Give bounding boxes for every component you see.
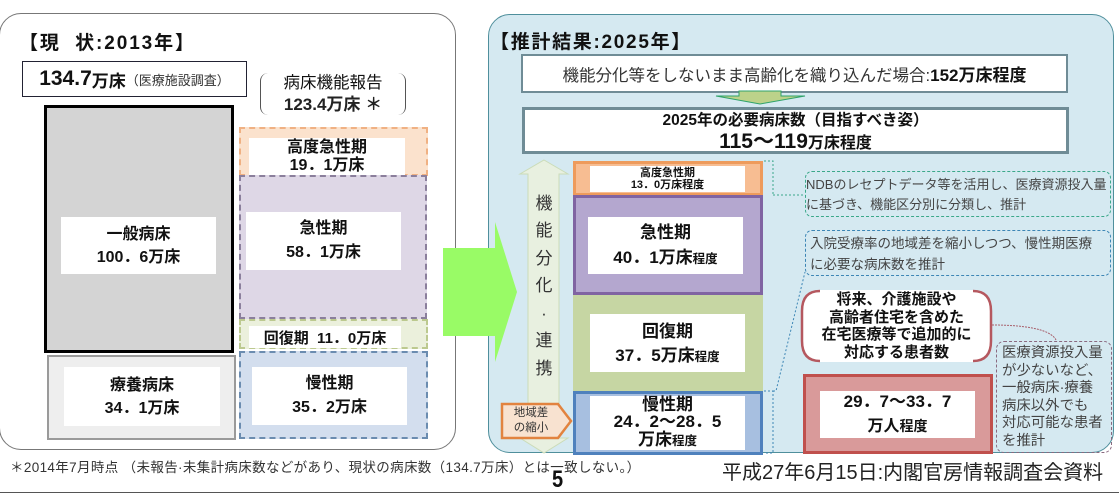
label: general beds xyxy=(61,217,216,274)
callout: home care patients xyxy=(801,290,992,362)
bracket: bed function report xyxy=(260,73,406,115)
callout: home care patients: 高齢者住宅を含めた xyxy=(829,308,964,326)
note: hospitalization rate xyxy=(805,230,1111,276)
note: NDB: NDBのレセプトデータ等を活用し、医療資源投入量 xyxy=(806,177,1106,192)
note: low resource patients: 一般病床·療養 xyxy=(1002,380,1093,396)
label: chronic current xyxy=(252,367,407,425)
block: recovery 2025 xyxy=(573,295,763,392)
label: acute current: 58．1万床 xyxy=(286,244,361,261)
note: low resource patients: 医療資源投入量 xyxy=(1002,345,1103,361)
label: chronic 2025 xyxy=(590,396,745,450)
label: chronic current: 慢性期 xyxy=(305,375,354,392)
label: acute current: 急性期 xyxy=(299,220,348,237)
callout: home care patients: 対応する患者数 xyxy=(844,344,949,360)
note: hospitalization rate: 入院受療率の地域差を縮小しつつ、慢性期医療 xyxy=(810,236,1092,251)
note: NDB: に基づき、機能区分別に分類し、推計 xyxy=(806,197,1026,212)
tag text: 地域差 xyxy=(514,407,548,419)
note: NDB xyxy=(805,171,1111,217)
label: high acute current xyxy=(249,138,405,175)
total beds box: 万床 xyxy=(92,72,126,90)
heading: estimate: 【推計結果:2025年】 xyxy=(490,32,692,53)
label: recovery 2025 xyxy=(590,314,745,372)
label: high acute 2025 xyxy=(590,166,745,192)
label: additional patients: 万人程度 xyxy=(867,418,928,435)
label: high acute current: 19．1万床 xyxy=(290,156,364,174)
note: low resource patients xyxy=(996,341,1112,453)
heading: current state: 【現 状:2013年】 xyxy=(19,33,196,54)
label: acute 2025: 急性期 xyxy=(640,222,691,242)
panel: current state 2013 xyxy=(0,13,456,450)
source: 平成27年6月15日:内閣官房情報調査会資料 xyxy=(722,462,1103,484)
block: chronic 2025 xyxy=(573,391,763,455)
total beds box xyxy=(22,61,247,97)
label: recovery current xyxy=(249,326,401,348)
label: chronic current: 35．2万床 xyxy=(292,399,367,416)
text: functional differentiation: 連 xyxy=(536,331,552,350)
note: low resource patients: を推計 xyxy=(1002,433,1045,449)
label: acute 2025 xyxy=(588,217,743,274)
bracket: bed function report: 病床機能報告 xyxy=(284,74,382,92)
box: required beds 2025: 115～119万床程度 xyxy=(719,130,872,152)
label: recovery 2025: 回復期 xyxy=(642,322,693,340)
text: functional differentiation xyxy=(536,194,552,378)
tag text xyxy=(514,406,548,434)
panel: estimate 2025 xyxy=(488,14,1114,453)
text: functional differentiation: 能 xyxy=(536,221,552,240)
bottom rule xyxy=(0,492,1119,493)
label: acute current xyxy=(246,212,401,270)
note: low resource patients: が少ないなど、 xyxy=(1002,363,1102,379)
block: general beds xyxy=(44,105,234,353)
bracket: bed function report: 123.4万床 ＊ xyxy=(284,95,382,114)
label: additional patients: 29．7～33．7 xyxy=(844,392,951,411)
block: high acute 2025 xyxy=(573,161,763,196)
label: long-term care beds: 療養病床 xyxy=(110,376,174,394)
text: functional differentiation: 携 xyxy=(536,359,552,378)
tag text: の縮小 xyxy=(514,422,548,434)
box: required beds 2025: 2025年の必要病床数（目指すべき姿） xyxy=(663,112,928,128)
label: high acute 2025: 13．0万床程度 xyxy=(631,179,704,191)
box: no differentiation case xyxy=(521,54,1068,93)
label: chronic 2025: 万床程度 xyxy=(638,430,697,449)
page number: 5 xyxy=(552,467,563,493)
block: high acute current xyxy=(239,127,428,176)
note: low resource patients: 病床以外でも xyxy=(1002,398,1088,414)
label: high acute current: 高度急性期 xyxy=(287,138,367,156)
note: low resource patients: 対応可能な患者 xyxy=(1002,415,1103,431)
block: long-term care beds xyxy=(47,355,236,440)
text: functional differentiation: 機 xyxy=(536,194,552,213)
label: general beds: 一般病床 xyxy=(106,226,170,242)
block: acute current xyxy=(239,175,427,319)
label: recovery current: 回復期 11．0万床 xyxy=(264,330,386,346)
label: general beds: 100．6万床 xyxy=(97,248,180,266)
label: long-term care beds xyxy=(64,367,220,426)
label: recovery 2025: 37．5万床程度 xyxy=(615,346,720,364)
box: no differentiation case: 機能分化等をしないまま高齢化を織り込んだ場合: xyxy=(563,66,930,84)
label: chronic 2025: 慢性期 xyxy=(642,395,693,414)
total beds box: （医療施設調査） xyxy=(126,72,230,88)
note: hospitalization rate: に必要な病床数を推計 xyxy=(810,257,945,272)
block: chronic current xyxy=(239,351,428,439)
box: required beds 2025 xyxy=(522,107,1069,154)
block: acute 2025 xyxy=(573,195,763,295)
text: functional differentiation: · xyxy=(541,304,547,323)
total beds box: 134.7 xyxy=(39,67,92,90)
block: additional patients xyxy=(803,374,993,454)
label: chronic 2025: 24．2～28．5 xyxy=(614,412,721,431)
callout: home care patients: 在宅医療等で追加的に xyxy=(821,326,972,343)
label: high acute 2025: 高度急性期 xyxy=(640,166,695,178)
callout: home care patients: 将来、介護施設や xyxy=(836,291,956,308)
label: long-term care beds: 34．1万床 xyxy=(105,400,179,416)
block: recovery current xyxy=(239,319,428,349)
text: functional differentiation: 化 xyxy=(536,276,552,295)
footnote: ＊2014年7月時点 （未報告·未集計病床数などがあり、現状の病床数（134.7万床）とは一致しない。） xyxy=(10,460,640,475)
box: no differentiation case: 152万床程度 xyxy=(930,66,1026,85)
label: acute 2025: 40．1万床程度 xyxy=(613,248,718,266)
label: additional patients xyxy=(820,391,975,438)
text: functional differentiation: 分 xyxy=(536,249,552,268)
